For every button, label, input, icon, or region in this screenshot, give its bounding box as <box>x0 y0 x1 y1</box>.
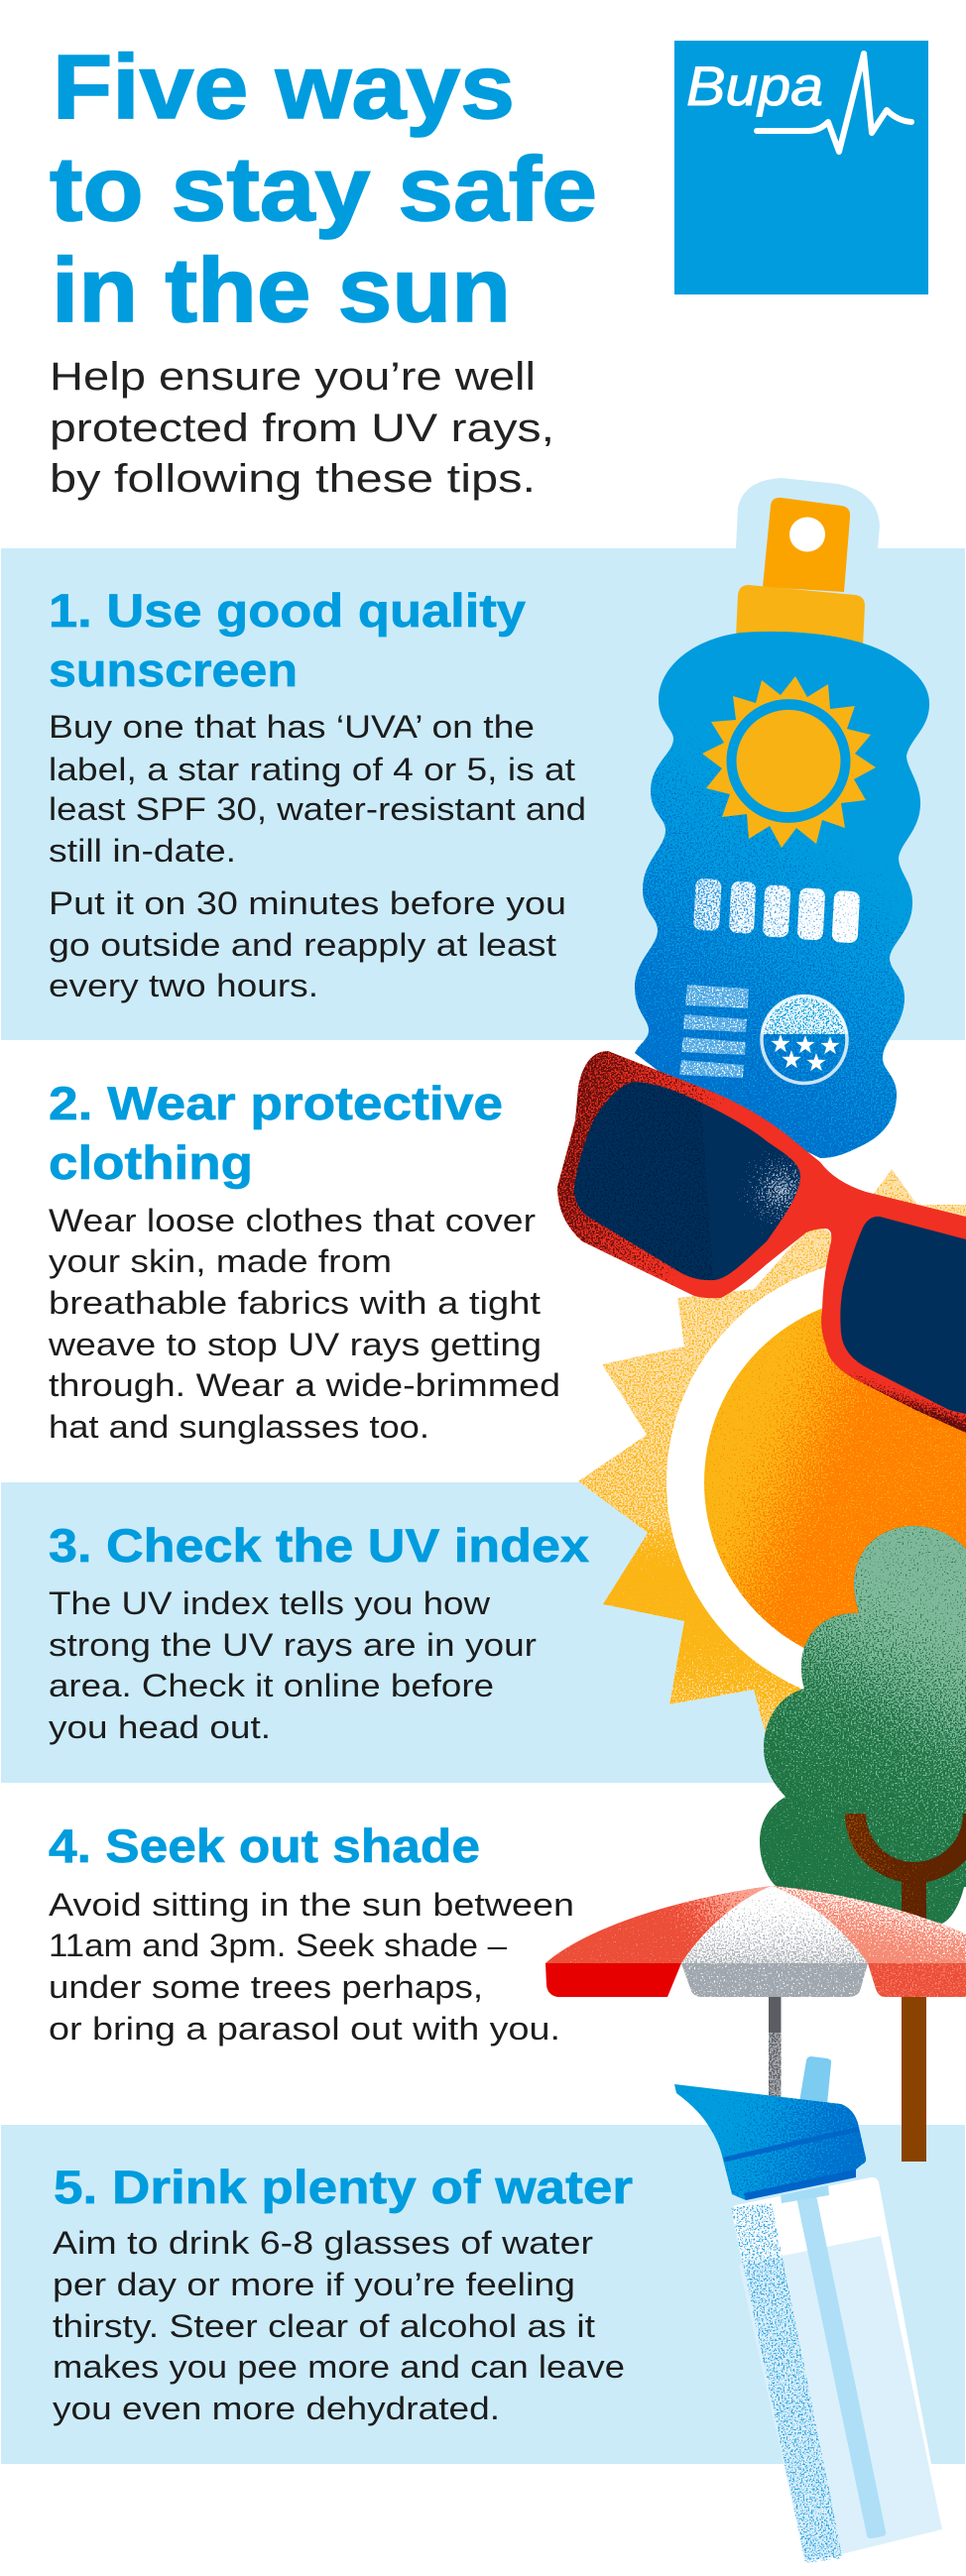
text block: clothing tips: breathable fabrics with a tight <box>49 1285 541 1321</box>
text block: shade tips: 11am and 3pm. Seek shade – <box>49 1928 507 1963</box>
text block: clothing tips: hat and sunglasses too. <box>49 1409 429 1445</box>
foliage <box>760 1526 966 1924</box>
title <box>50 37 597 341</box>
text block: shade tips <box>49 1887 574 2047</box>
heading: use good quality sunscreen: 1. Use good quality <box>49 584 526 637</box>
text block: water tips: thirsty. Steer clear of alcohol as it <box>53 2308 595 2344</box>
heading: wear protective clothing: clothing <box>49 1136 253 1189</box>
logo: Bupa: Bupa <box>686 55 823 117</box>
text block: water tips: you even more dehydrated. <box>53 2391 500 2426</box>
spray nozzle <box>763 498 850 592</box>
text block: UV index tips: strong the UV rays are in your <box>49 1627 537 1663</box>
straw top <box>799 2056 831 2104</box>
text block: clothing tips: your skin, made from <box>49 1243 392 1279</box>
bottle sun icon <box>702 676 876 848</box>
heading: seek out shade: 4. Seek out shade <box>49 1819 480 1872</box>
heading: wear protective clothing <box>49 1077 503 1189</box>
panel: 1 sunscreen <box>1 548 965 1040</box>
right lens <box>840 1217 966 1414</box>
text block: UV index tips: area. Check it online before <box>49 1668 494 1703</box>
icon: tree <box>760 1526 966 2162</box>
intro text <box>50 355 554 501</box>
straw collar <box>781 2185 829 2203</box>
icon: sunscreen bottle <box>635 478 929 1158</box>
red frame <box>557 1051 966 1433</box>
text block: sunscreen tips: label, a star rating of 4 or 5, is at <box>49 752 575 787</box>
text block: water tips <box>53 2225 625 2426</box>
bottle body <box>732 2177 942 2561</box>
text block: UV index tips: The UV index tells you how <box>49 1585 491 1621</box>
bottle pills <box>693 878 860 943</box>
text block: sunscreen tips: still in-date. <box>49 833 236 869</box>
collar <box>736 585 865 646</box>
left lens <box>573 1082 801 1281</box>
title: to stay safe <box>50 139 597 240</box>
intro text: Help ensure you’re well <box>50 355 536 399</box>
bottle halo <box>736 478 880 548</box>
text block: sunscreen tips: Put it on 30 minutes before you <box>49 885 566 921</box>
red segment <box>545 1886 772 1997</box>
icon: water bottle <box>674 2056 942 2563</box>
intro text: by following these tips. <box>50 457 536 501</box>
text block: sunscreen tips: go outside and reapply at least <box>49 927 556 963</box>
text block: shade tips: Avoid sitting in the sun between <box>49 1887 574 1923</box>
star rating badge <box>761 995 848 1083</box>
text block: water tips: makes you pee more and can leave <box>53 2349 625 2385</box>
icon: large sun <box>578 1169 966 1735</box>
heading: use good quality sunscreen: sunscreen <box>49 644 298 696</box>
white segment <box>681 1886 868 1997</box>
panel: 3 UV index <box>1 1482 966 1783</box>
text block: clothing tips: weave to stop UV rays getting <box>48 1327 542 1362</box>
heading: drink plenty of water: 5. Drink plenty of water <box>54 2161 633 2213</box>
intro text: protected from UV rays, <box>50 407 554 450</box>
trunk <box>845 1814 966 2162</box>
text block: sunscreen tips: least SPF 30, water-resistant and <box>49 791 586 827</box>
bottle label lines <box>679 985 749 1078</box>
bottle speckle <box>731 2203 843 2563</box>
text block: shade tips: or bring a parasol out with you. <box>49 2011 560 2047</box>
bottle body <box>635 632 929 1158</box>
text block: sunscreen tips <box>49 709 586 1003</box>
text block: sunscreen tips: every two hours. <box>49 968 318 1003</box>
text block: clothing tips: through. Wear a wide-brimmed <box>49 1367 560 1403</box>
heading: check the UV index: 3. Check the UV index <box>49 1519 589 1572</box>
heading: use good quality sunscreen <box>49 584 526 696</box>
water level <box>739 2236 942 2561</box>
text block: water tips: Aim to drink 6-8 glasses of water <box>53 2225 593 2261</box>
panel: 2 clothing text <box>48 1077 560 1445</box>
panel: 5 water <box>1 2125 965 2464</box>
inner straw <box>796 2195 886 2538</box>
salmon segment <box>772 1886 966 1997</box>
text block: sunscreen tips: Buy one that has ‘UVA’ on the <box>49 709 535 745</box>
text block: water tips: per day or more if you’re feeling <box>53 2267 575 2302</box>
icon: parasol pole <box>769 1997 782 2100</box>
lid <box>674 2084 866 2200</box>
heading: wear protective clothing: 2. Wear protective <box>49 1077 503 1129</box>
title: Five ways <box>53 37 515 138</box>
text block: shade tips: under some trees perhaps, <box>49 1969 483 2005</box>
logo: Bupa <box>674 41 928 294</box>
text block: clothing tips: Wear loose clothes that cover <box>49 1203 536 1238</box>
text block: UV index tips <box>49 1585 537 1745</box>
panel: 4 shade text <box>49 1819 574 2047</box>
text block: UV index tips: you head out. <box>49 1709 271 1745</box>
icon: sunglasses <box>557 1051 966 1433</box>
icon: parasol <box>545 1886 966 1997</box>
text block: clothing tips <box>48 1203 560 1445</box>
title: in the sun <box>52 240 511 341</box>
